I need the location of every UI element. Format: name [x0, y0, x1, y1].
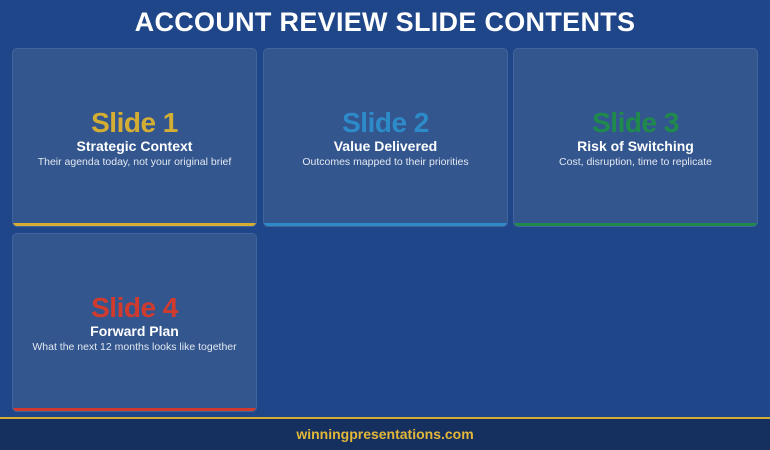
footer: winningpresentations.com	[296, 426, 474, 442]
accent bar	[13, 408, 256, 411]
panel: slide 3	[513, 48, 758, 227]
footer	[0, 417, 770, 450]
accent bar	[514, 223, 757, 226]
panel: slide 2	[263, 48, 508, 227]
heading: slide 3: Slide 3	[592, 107, 679, 138]
text block: Cost, disruption, time to replicate	[559, 156, 712, 168]
subheading: Strategic Context	[77, 138, 192, 154]
heading: slide 2: Slide 2	[342, 107, 429, 138]
text block: Their agenda today, not your original brief	[38, 156, 231, 168]
subheading: Risk of Switching	[577, 138, 694, 154]
heading: slide 4: Slide 4	[91, 292, 178, 323]
heading: slide 1: Slide 1	[91, 107, 178, 138]
panel: slide 4	[12, 233, 257, 412]
panel: slide 1	[12, 48, 257, 227]
subheading: Forward Plan	[90, 323, 179, 339]
accent bar	[13, 223, 256, 226]
subheading: Value Delivered	[334, 138, 437, 154]
title: ACCOUNT REVIEW SLIDE CONTENTS	[135, 7, 635, 37]
text block: Outcomes mapped to their priorities	[302, 156, 469, 168]
accent bar	[264, 223, 507, 226]
text block: What the next 12 months looks like together	[32, 341, 237, 353]
